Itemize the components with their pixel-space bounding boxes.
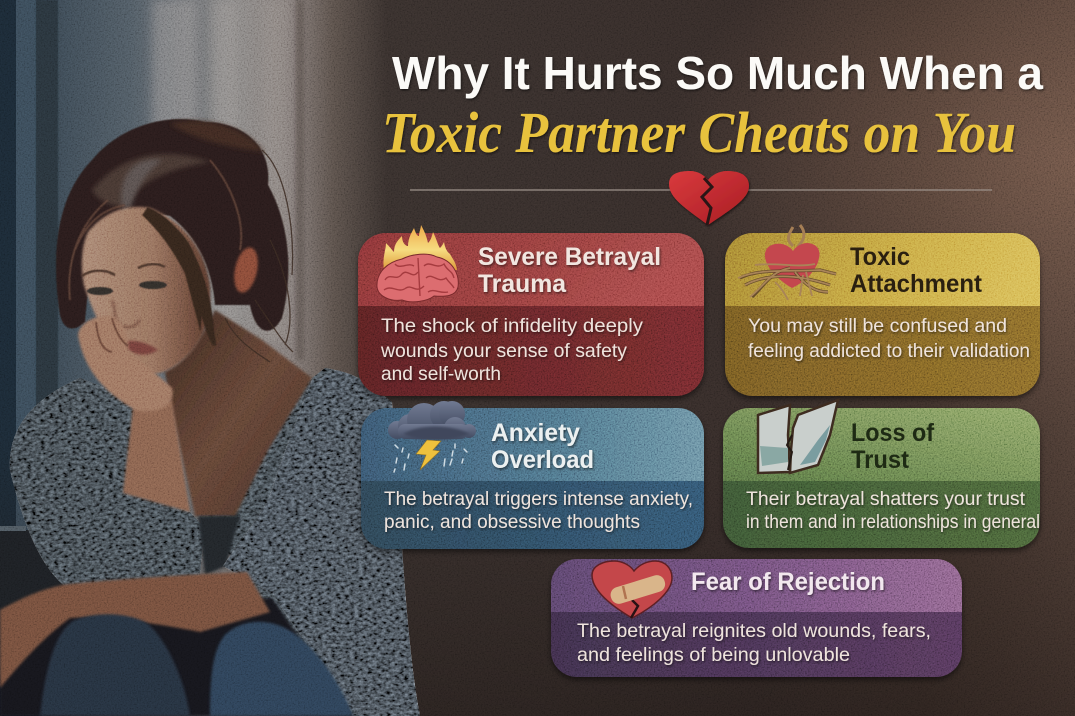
card text: anxiety overload: panic, and obsessive thoughts: [384, 511, 640, 533]
icon: brain on fire: [377, 225, 458, 302]
jeans: [40, 614, 353, 716]
hair mass: [56, 119, 293, 362]
title: [382, 47, 1043, 165]
photo: sad woman leaning on her hand: [0, 119, 420, 716]
card text: fear of rejection: and feelings of being unlovable: [577, 644, 850, 666]
card text: fear of rejection: Fear of Rejection: [691, 568, 885, 596]
divider line: [410, 189, 992, 191]
panel: anxiety overload: [361, 408, 704, 549]
card text: toxic attachment: Attachment: [850, 270, 983, 298]
card text: fear of rejection: [577, 568, 931, 666]
card text: loss of trust: in them and in relationships in general: [746, 511, 1040, 533]
card text: severe betrayal trauma: wounds your sense of safety: [380, 340, 627, 362]
card text: anxiety overload: Anxiety: [491, 419, 580, 447]
icon: heart with bandage: [592, 561, 672, 618]
title line 1: Why It Hurts So Much When a: [392, 47, 1043, 99]
icon: shattered glass: [758, 400, 838, 473]
hand under chin: [78, 316, 173, 411]
card text: severe betrayal trauma: and self-worth: [381, 363, 501, 385]
icon: heart wrapped in thorns: [738, 225, 836, 300]
panel: severe betrayal trauma: [358, 233, 704, 396]
title line 2: Toxic Partner Cheats on You: [382, 100, 1016, 165]
card text: loss of trust: Loss of: [851, 419, 935, 447]
card text: anxiety overload: [384, 419, 693, 533]
shadow beneath arms: [0, 598, 353, 716]
icon: storm cloud with lightning: [388, 401, 476, 472]
card text: severe betrayal trauma: Severe Betrayal: [478, 243, 661, 271]
panel grain overlay: [358, 233, 1040, 677]
icon: broken heart: [669, 171, 749, 225]
card text: fear of rejection: The betrayal reignites old wounds, fears,: [577, 620, 931, 642]
card text: severe betrayal trauma: The shock of infidelity deeply: [381, 315, 643, 337]
card text: toxic attachment: Toxic: [850, 243, 910, 271]
neck and chest skin: [165, 310, 312, 516]
sweater back and torso: [10, 368, 420, 716]
right sleeve: [223, 370, 420, 716]
card text: loss of trust: Their betrayal shatters your trust: [746, 488, 1026, 510]
card text: toxic attachment: You may still be confused and: [748, 315, 1007, 337]
card text: toxic attachment: [748, 243, 1030, 362]
card text: severe betrayal trauma: Trauma: [478, 270, 567, 298]
card text: anxiety overload: The betrayal triggers intense anxiety,: [384, 488, 693, 510]
card text: severe betrayal trauma: [380, 243, 661, 385]
eyes and brows: [82, 264, 167, 355]
panel: fear of rejection: [551, 559, 962, 677]
ear: [230, 245, 262, 295]
face: [82, 207, 210, 374]
card text: loss of trust: [746, 419, 1040, 533]
card text: toxic attachment: feeling addicted to their validation: [748, 340, 1030, 362]
card text: loss of trust: Trust: [851, 446, 910, 474]
card text: anxiety overload: Overload: [491, 446, 594, 474]
panel: toxic attachment: [725, 233, 1040, 396]
dark undershirt: [198, 516, 240, 575]
face-framing hair strands: [143, 208, 215, 345]
panel: loss of trust: [723, 408, 1040, 548]
lower forearm: [0, 572, 270, 688]
forearm supporting head: [123, 400, 190, 512]
